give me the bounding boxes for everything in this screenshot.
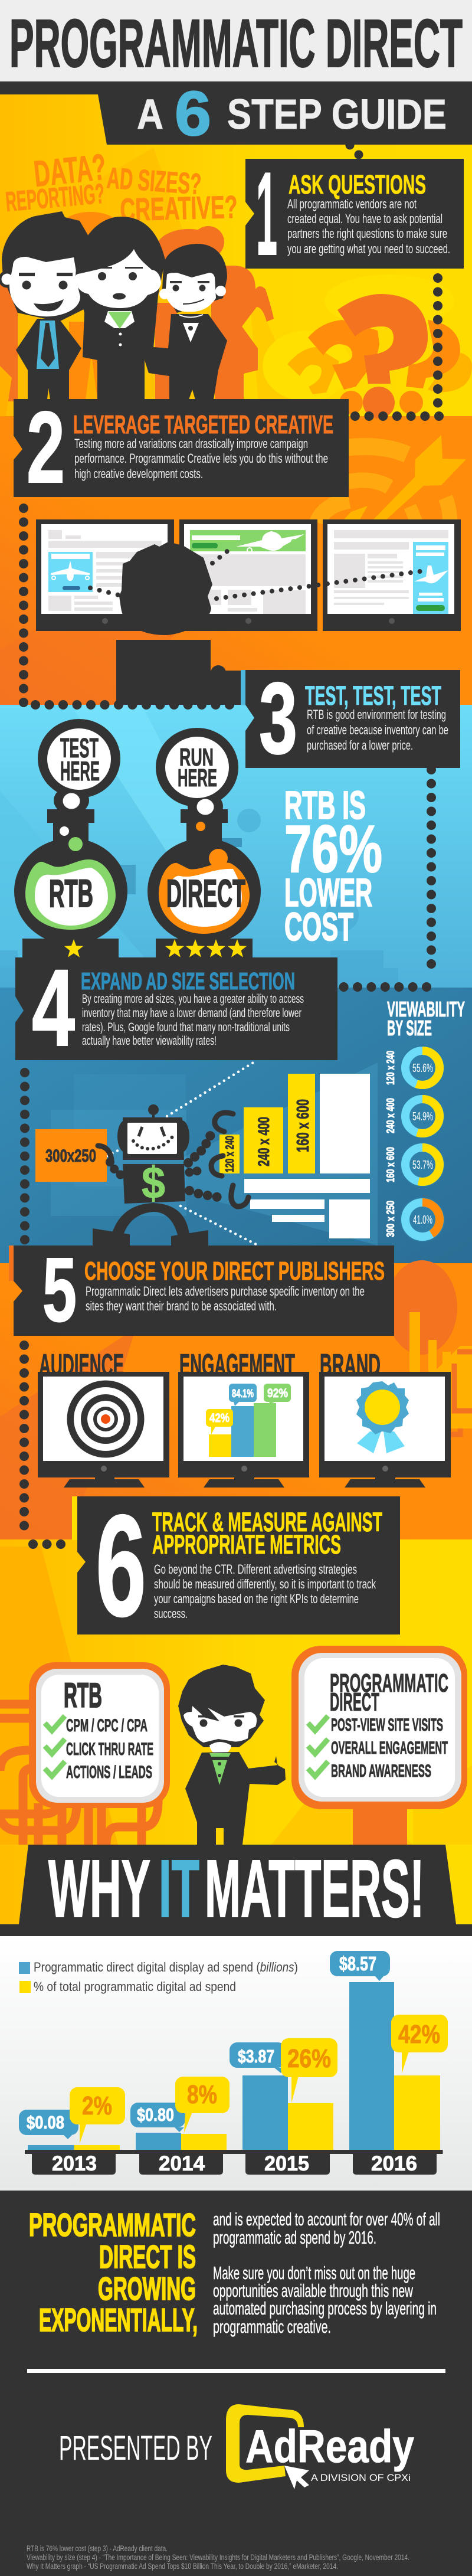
robot: $ [142, 1158, 165, 1208]
floating questions: CREATIVE? [120, 189, 238, 228]
source notes: Why It Matters graph - “US Programmatic Ad Spend Tops $10 Billion This Year, to Double by 2016,” eMarketer, 2014. [27, 2562, 338, 2571]
pipes behind RTB panel [0, 1704, 158, 1845]
step 4 panel: EXPAND AD SIZE SELECTION [81, 967, 295, 995]
callout: RTB is 76% lower cost: LOWER [284, 871, 372, 915]
callout: RTB is 76% lower cost: COST [284, 905, 353, 949]
year tabs: 2015 [264, 2152, 309, 2175]
icon: faint hand cursor pattern [409, 1312, 472, 1428]
panel: RTB metrics: CLICK THRU RATE [66, 1740, 153, 1759]
year tabs: 2016 [371, 2152, 417, 2175]
logo: AdReady: A DIVISION OF CPXi [311, 2472, 411, 2483]
heading: why it matters: IT [159, 1843, 199, 1934]
monitor: brand [319, 1348, 451, 1488]
character: boy with bow tie [145, 244, 227, 400]
text block: forecast [213, 2209, 440, 2337]
text block: growing exponentially: DIRECT IS [99, 2238, 196, 2275]
step 4 panel: rates). Plus, Google found that many non-traditional units [82, 1021, 290, 1034]
callouts: dollar values: $3.87 [238, 2046, 274, 2067]
logo: AdReady [226, 2404, 414, 2489]
callouts: dollar values: $0.08 [27, 2112, 64, 2133]
donut: 240x400: 54.9% [412, 1110, 433, 1123]
step 1 panel [245, 148, 464, 280]
text block: growing exponentially: PROGRAMMATIC [29, 2206, 196, 2243]
icon: star [64, 939, 83, 957]
callouts: percent values: 42% [398, 2020, 440, 2049]
rating stars [165, 939, 247, 957]
step 6 panel: your campaigns based on the right KPIs to determine [154, 1591, 359, 1606]
flask: RTB: HERE [60, 756, 100, 786]
callouts: dollar values [19, 1951, 390, 2139]
donut: 120x240: 55.6% [412, 1062, 433, 1075]
header band [0, 0, 472, 81]
viewability by size [385, 997, 465, 1242]
flask: RTB: RTB [49, 871, 93, 915]
dotted connector: step 3 to step 4 [342, 770, 431, 987]
chart legend: Programmatic direct digital display ad spend (billions) [34, 1960, 298, 1975]
ad block: 300x250: 300x250 [45, 1146, 96, 1166]
heading: why it matters: WHY [48, 1843, 150, 1934]
silhouette: person viewing monitors [116, 542, 241, 705]
panel: RTB metrics: CPM / CPC / CPA [66, 1716, 148, 1735]
bar chart: engagement: 84.1% [232, 1388, 254, 1400]
ad size blocks: 120 x 240 [224, 1136, 237, 1172]
step 2 panel: 2 [27, 391, 65, 504]
year tabs [32, 2152, 437, 2175]
chart legend: % of total programmatic digital ad spend [34, 1979, 236, 1994]
ad size blocks: 160 x 600 [294, 1099, 313, 1152]
donut: 300x250 [385, 1197, 445, 1242]
monitor: display ad right [323, 519, 461, 631]
post: programmatic direct sign [353, 1808, 407, 1845]
year tabs: 2014 [159, 2152, 205, 2175]
text block: growing exponentially: GROWING [98, 2270, 196, 2307]
subtitle band: 6 [175, 78, 211, 149]
background: dark blue step 4 section [0, 988, 472, 1263]
donut: 160x600: 160 x 600 [385, 1147, 396, 1182]
panel: RTB metrics: RTB [64, 1676, 102, 1715]
step 2 panel: high creative development costs. [74, 466, 203, 481]
year tabs: 2013 [52, 2152, 97, 2175]
step 3 panel: purchased for a lower price. [307, 738, 413, 753]
text block: growing exponentially [29, 2206, 198, 2338]
bar chart: yearly spend [25, 1982, 442, 2154]
logo: AdReady: AdReady [245, 2420, 414, 2472]
callout: RTB is 76% lower cost [284, 783, 382, 949]
icon: target [67, 1380, 144, 1458]
subtitle band [0, 78, 472, 149]
character: bearded man presenter [178, 1665, 286, 1845]
step 6 panel: success. [154, 1606, 188, 1621]
background: orange step 5 section [0, 1260, 472, 1539]
flask: RTB [14, 719, 127, 957]
bar chart: engagement: 42% [209, 1411, 230, 1425]
callout: RTB is 76% lower cost: 76% [284, 812, 382, 886]
icon: check marks [45, 1716, 65, 1776]
monitor: display ad left [36, 519, 174, 631]
flask: Direct [148, 728, 261, 957]
monitor: engagement [178, 1348, 309, 1488]
panel: RTB metrics [29, 1662, 170, 1808]
icon: faint target and arrow [317, 435, 466, 522]
viewability by size: BY SIZE [387, 1016, 432, 1040]
donut: 240x400: 240 x 400 [385, 1098, 396, 1133]
background: light blue step 3 section [0, 705, 472, 988]
robot [93, 1104, 248, 1245]
callouts: dollar values: $8.57 [339, 1953, 376, 1975]
step 6 panel: APPROPRIATE METRICS [152, 1529, 341, 1560]
character: woman with green collar [76, 217, 165, 400]
dotted connector: step 2 to step 3 [24, 508, 236, 705]
people silhouettes behind characters [0, 212, 274, 416]
icon: airplane [51, 561, 90, 581]
step 4 panel: inventory that may have a lower demand (and therefore lower [82, 1006, 301, 1020]
callouts: percent values: 2% [82, 2091, 112, 2120]
step 3 panel: 3 [259, 662, 297, 775]
flask: Direct: DIRECT [166, 871, 245, 915]
floating questions [4, 147, 238, 228]
step 2 panel: performance. Programmatic Creative lets you do this without the [74, 451, 328, 466]
bar chart: engagement: 92% [267, 1387, 288, 1400]
step 2 panel: Testing more ad variations can drastically improve campaign [74, 436, 308, 451]
background: yellow step 6 section [0, 1539, 472, 1924]
icon: big question marks [287, 294, 472, 419]
monitor: engagement: ENGAGEMENT [179, 1348, 295, 1382]
icon: award ribbon [356, 1381, 409, 1453]
monitor: display ad centre [179, 519, 317, 631]
step 6 panel: should be measured differently, so it is important to track [154, 1577, 376, 1591]
donut: 240x400 [385, 1094, 445, 1139]
dotted connector: step 4 to step 5 [20, 1073, 30, 1240]
flask: Direct: RUN [179, 743, 214, 771]
monitor: audience [38, 1348, 169, 1488]
source notes [27, 2544, 409, 2571]
donut: 160x600 [385, 1142, 445, 1187]
background: yellow top section [0, 81, 472, 416]
callout: RTB is 76% lower cost: RTB IS [284, 783, 366, 828]
robot arms [98, 1113, 248, 1207]
donut: 300x250: 41.0% [413, 1214, 432, 1227]
dotted connector: step 5 to step 6 [24, 1345, 74, 1544]
text block: growing exponentially: EXPONENTIALLY, [39, 2302, 198, 2338]
callouts: dollar values: $0.80 [137, 2104, 174, 2125]
step 5 panel [9, 1239, 394, 1341]
floating questions: DATA? [32, 147, 108, 195]
donut: 160x600: 53.7% [412, 1159, 433, 1172]
monitor: brand: BRAND [320, 1348, 381, 1382]
presented by: PRESENTED BY [59, 2429, 212, 2467]
callouts: percent values: 26% [287, 2044, 331, 2073]
dotted white lines from robot [107, 1062, 256, 1244]
ad block: 300x250 [35, 1129, 107, 1182]
step 4 panel: actually have better viewability rates! [82, 1034, 217, 1048]
step 3 panel [241, 662, 460, 775]
floating questions: AD SIZES? [106, 161, 202, 201]
panel: programmatic direct metrics [291, 1646, 467, 1809]
text block: forecast: programmatic creative. [213, 2316, 331, 2337]
panel: RTB metrics: ACTIONS / LEADS [66, 1763, 152, 1782]
icon: airplane [414, 565, 448, 583]
background: orange step 2 section [0, 416, 472, 705]
monitor: audience: AUDIENCE [39, 1348, 124, 1382]
subtitle band: A [137, 91, 163, 138]
bar chart: engagement [206, 1384, 291, 1457]
donut: 300x250: 300 x 250 [385, 1201, 396, 1237]
panel: spend chart [0, 1936, 472, 2191]
dotted connector: step 1 to step 2 [346, 140, 439, 416]
floating questions: REPORTING? [4, 178, 106, 217]
ad size blocks [219, 1074, 370, 1238]
icon: check marks [308, 1716, 328, 1776]
donut: 120x240: 120 x 240 [385, 1051, 396, 1085]
flask: RTB: TEST [60, 733, 99, 763]
step 6 panel: Go beyond the CTR. Different advertising strategies [154, 1562, 357, 1577]
step 4 panel: By creating more ad sizes, you have a greater ability to access [82, 992, 304, 1006]
ad size blocks: 240 x 400 [255, 1117, 273, 1166]
source notes: RTB is 76% lower cost (step 3) - AdReady client data. [27, 2544, 168, 2553]
donut: 120x240 [385, 1045, 445, 1090]
chart legend [19, 1960, 298, 1994]
step 4 panel [15, 947, 337, 1069]
step 4 panel: 4 [32, 947, 75, 1069]
step 6 panel [72, 1485, 400, 1646]
callouts: percent values [70, 2015, 448, 2144]
heading: why it matters [0, 1843, 472, 1936]
character: man with blue tie [0, 211, 88, 400]
step 5 panel: 5 [42, 1239, 77, 1341]
flask: Direct: HERE [178, 764, 217, 792]
callouts: percent values: 8% [187, 2080, 217, 2109]
dotted lines between ad placements [90, 551, 420, 599]
step 1 panel: 1 [256, 148, 277, 280]
step 2 panel [14, 391, 349, 504]
step 6 panel: 6 [96, 1485, 146, 1646]
step 5 panel: sites they want their brand to be associated with. [86, 1299, 277, 1313]
panel: programmatic direct metrics: DIRECT [330, 1688, 379, 1717]
panel: footer [0, 2191, 472, 2576]
icon: airplane [236, 531, 304, 551]
